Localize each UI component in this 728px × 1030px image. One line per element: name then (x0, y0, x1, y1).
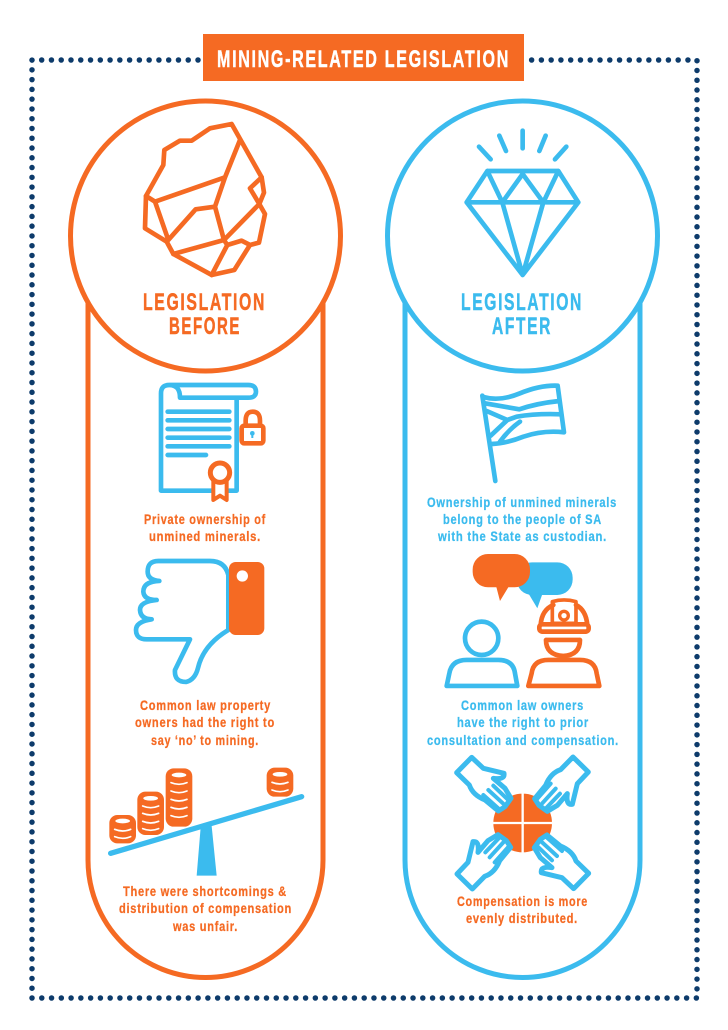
text: prior consultation (427, 698, 619, 748)
text: shortcomings: was unfair. (172, 919, 238, 934)
text: private ownership: Private ownership of (144, 512, 266, 527)
capsule outline: after (405, 300, 640, 978)
icon: consultation between owner and miner (447, 554, 599, 686)
heading: legislation after: AFTER (492, 313, 552, 340)
icon: rock (145, 124, 265, 275)
text: shortcomings: There were shortcomings & (123, 884, 287, 899)
icon: flag of South Africa (482, 386, 564, 481)
text: common law property: Common law property (140, 698, 271, 713)
heading: legislation before (143, 289, 266, 340)
text: prior consultation: have the right to prior (457, 715, 589, 730)
circle: before (70, 101, 340, 371)
text: common law property: say ‘no’ to mining. (151, 733, 259, 748)
text: private ownership: unmined minerals. (149, 529, 261, 544)
text: ownership: belong to the people of SA (443, 512, 602, 527)
heading: legislation after (461, 289, 583, 340)
text: common law property (135, 698, 275, 748)
text: prior consultation: Common law owners (461, 698, 584, 713)
panel: legislation after (388, 101, 658, 978)
text: prior consultation: consultation and compensation. (427, 733, 619, 748)
icon: thumbs down (136, 561, 264, 682)
capsule outline: before (88, 300, 323, 978)
text: common law property: owners had the right to (135, 715, 275, 730)
text: shortcomings (119, 884, 292, 934)
text: ownership: Ownership of unmined minerals (427, 495, 617, 510)
text: evenly distributed: Compensation is more (457, 894, 588, 909)
heading: legislation before: LEGISLATION (143, 289, 266, 316)
icon: unbalanced scale with coins (109, 768, 302, 876)
text: evenly distributed: evenly distributed. (466, 911, 578, 926)
heading: legislation after: LEGISLATION (461, 289, 583, 316)
text: shortcomings: distribution of compensation (119, 901, 292, 916)
text: evenly distributed (457, 894, 588, 926)
title banner: MINING-RELATED LEGISLATION (217, 46, 510, 73)
circle: after (388, 101, 658, 371)
heading: legislation before: BEFORE (169, 313, 241, 340)
panel: legislation before (70, 101, 340, 978)
text: private ownership (144, 512, 266, 544)
text: ownership (427, 495, 617, 544)
title banner (203, 34, 524, 81)
icon: four hands around a shared circle (457, 757, 589, 889)
icon: document with lock and ribbon (161, 385, 263, 500)
text: ownership: with the State as custodian. (437, 529, 607, 544)
icon: diamond (467, 131, 578, 275)
